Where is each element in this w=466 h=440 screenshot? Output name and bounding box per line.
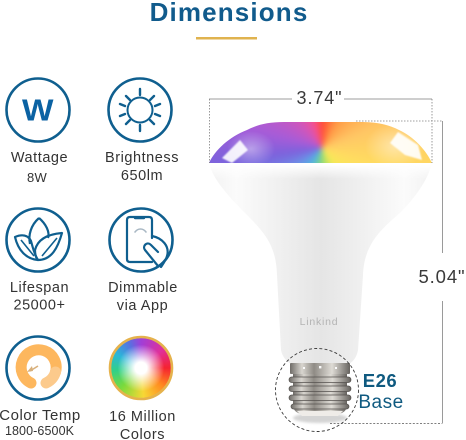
dimmable label: Dimmable bbox=[108, 280, 178, 296]
lifespan label: Lifespan bbox=[10, 280, 69, 296]
wattage label: 8W bbox=[27, 170, 47, 185]
icon: lifespan leaves bbox=[6, 208, 70, 272]
brightness label: 650lm bbox=[121, 168, 163, 184]
wattage label bbox=[11, 150, 68, 185]
dimmable label: via App bbox=[117, 298, 168, 314]
icon: brightness sun bbox=[108, 78, 172, 142]
icon: wattage bbox=[6, 78, 70, 142]
brightness label bbox=[105, 150, 179, 184]
lifespan label bbox=[10, 280, 69, 314]
E26 base label: Base bbox=[358, 392, 404, 413]
color wheel ring bbox=[110, 337, 172, 399]
wattage label: Wattage bbox=[11, 150, 68, 166]
base dashed circle bbox=[276, 348, 358, 432]
E26 base label bbox=[358, 370, 404, 413]
screw base bbox=[289, 363, 351, 423]
brightness label: Brightness bbox=[105, 150, 179, 166]
brand label: Linkind bbox=[300, 316, 338, 328]
title underline bbox=[196, 37, 257, 40]
sixteen million colors label bbox=[109, 409, 176, 440]
lifespan label: 25000+ bbox=[13, 298, 66, 314]
width dimension bbox=[209, 88, 432, 163]
width dimension: 3.74" bbox=[297, 88, 342, 108]
dome highlights bbox=[222, 132, 422, 163]
bulb body bbox=[210, 165, 431, 364]
icon: color temperature bbox=[6, 336, 70, 400]
sixteen million colors label: 16 Million bbox=[109, 409, 176, 425]
color temp label: Color Temp bbox=[0, 407, 81, 424]
rgb bulb dome bbox=[209, 122, 432, 163]
E26 base label: E26 bbox=[363, 370, 397, 391]
icon: dimmable phone bbox=[110, 208, 172, 272]
dimmable label bbox=[108, 280, 178, 314]
icon: wattage: W bbox=[22, 92, 54, 128]
color temp label: 1800-6500K bbox=[5, 424, 75, 438]
height dimension: 5.04" bbox=[418, 266, 466, 287]
color temp label bbox=[0, 407, 81, 438]
icon: color wheel bbox=[111, 338, 171, 398]
